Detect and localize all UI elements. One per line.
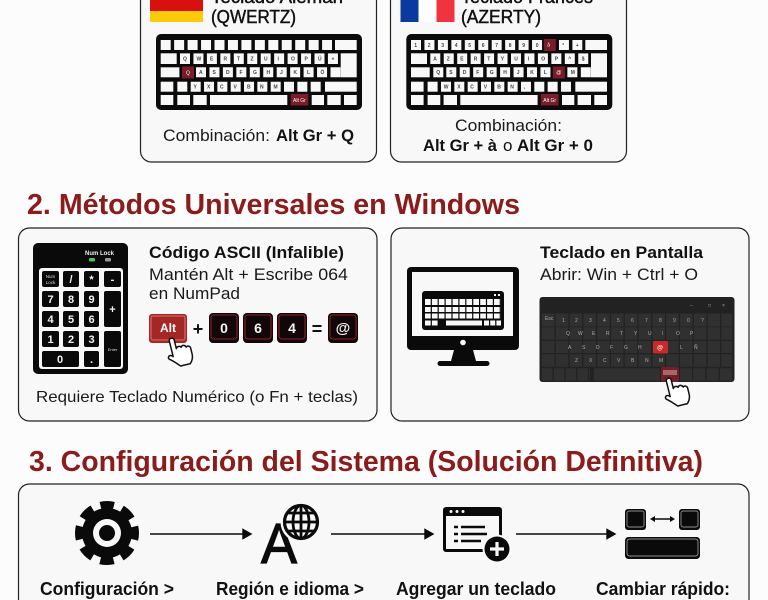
keyboard: AZERTY layout: QSDFGHJKLM [436, 70, 575, 76]
image: dark on-screen keyboard: −□× [690, 303, 725, 309]
icon: numeric keypad: 5 [68, 314, 74, 326]
image: dark on-screen keyboard [540, 297, 734, 382]
text: ASCII instructions: en NumPad [149, 284, 240, 303]
icon: numeric keypad: 0 [57, 354, 63, 366]
image: dark on-screen keyboard: 1234567890? [562, 318, 704, 324]
text: numeric keypad note: Requiere Teclado Numérico (o Fn + teclas) [36, 389, 358, 406]
icon: pointing hand [164, 334, 194, 368]
icon: gear [80, 506, 134, 560]
keyboard: AZERTY layout: Alt Gr [543, 98, 556, 104]
icon: numeric keypad: 2 [68, 334, 74, 346]
text: French combination: Alt Gr + à [423, 136, 498, 155]
icon: numeric keypad: . [90, 354, 93, 366]
icon: numeric keypad: 7 [47, 294, 54, 306]
icon: numeric keypad: Lock [46, 280, 56, 285]
icon: pointing hand [661, 374, 691, 408]
image: dark on-screen keyboard: Esc [545, 316, 554, 322]
text: German combination: Alt Gr + Q [276, 127, 354, 145]
image: dark on-screen keyboard: ASDFGHLÑ [568, 344, 698, 351]
text: French combination [423, 116, 593, 155]
icon: numeric keypad: / [69, 274, 73, 286]
text: on-screen keyboard heading: Abrir: Win + Ctrl + O [540, 265, 698, 284]
panel: French keyboard [390, 0, 626, 162]
key sequence: Alt + 0 6 4 = @: + [193, 319, 203, 339]
icon: numeric keypad: Enter [108, 347, 118, 352]
keyboard: AZERTY layout [406, 34, 612, 110]
keyboard: QWERTZ layout: Alt Gr [293, 98, 306, 104]
icon: numeric keypad: 6 [88, 314, 95, 326]
text: French combination: Combinación: [455, 116, 562, 135]
key sequence: Alt + 0 6 4 = @: 4 [288, 320, 296, 336]
text: French combination: Alt Gr + 0 [517, 136, 593, 155]
icon: numeric keypad [33, 243, 128, 374]
icon: numeric keypad: 8 [68, 294, 74, 306]
heading: section 2: 2. Métodos Universales en Windows [27, 189, 520, 221]
arrow: step 1 to 2 [150, 530, 251, 538]
keyboard: QWERTZ layout: YXCVBNM [194, 84, 278, 90]
heading: French keyboard [461, 0, 593, 27]
icon: numeric keypad: 3 [88, 334, 95, 346]
text: French combination: o [503, 136, 512, 155]
icon: numeric keypad: 4 [47, 314, 54, 326]
text: step labels: Configuración > [40, 579, 174, 599]
icon: numeric keypad: 9 [88, 294, 95, 306]
text: German combination: Combinación: [163, 127, 270, 145]
text: ASCII instructions: Mantén Alt + Escribe 064 [149, 265, 348, 284]
key sequence: Alt + 0 6 4 = @ [149, 313, 358, 343]
icon: numeric keypad: - [111, 274, 115, 286]
icon: French flag [400, 0, 454, 22]
key sequence: Alt + 0 6 4 = @: 0 [220, 320, 228, 336]
icon: numeric keypad: + [109, 304, 116, 316]
key sequence: Alt + 0 6 4 = @: 6 [254, 320, 262, 336]
icon: numeric keypad: Num [46, 274, 55, 279]
panel: German keyboard [140, 0, 376, 162]
image: dark on-screen keyboard: ZXCVBNM [575, 358, 663, 364]
text: ASCII instructions: Código ASCII (Infalible) [149, 243, 344, 262]
icon: numeric keypad: * [89, 274, 94, 286]
keyboard: QWERTZ layout [156, 34, 362, 110]
keyboard: AZERTY layout: AZERTYUIOP^$ [433, 56, 585, 62]
text: step labels: Cambiar rápido: [596, 579, 730, 599]
image: dark on-screen keyboard: QWERTYUIOP [566, 331, 694, 337]
key sequence: Alt + 0 6 4 = @: Alt [160, 321, 176, 335]
keyboard: AZERTY layout: à [547, 42, 550, 48]
icon: numeric keypad: 1 [47, 334, 54, 346]
heading: German keyboard [211, 0, 343, 27]
panel: ASCII code [18, 228, 377, 421]
text: step labels: Región e idioma > [216, 579, 364, 599]
image: dark on-screen keyboard: @ [657, 346, 663, 352]
keyboard: QWERTZ layout: QWERTZUIOPÜ+ [183, 56, 334, 62]
icon: German flag [150, 0, 203, 22]
keyboard: AZERTY layout: 1234567890°+ [414, 43, 579, 49]
panel: system configuration [18, 484, 749, 600]
text: German combination [163, 127, 354, 145]
keyboard: AZERTY layout: @ [556, 70, 561, 76]
icon: language and globe [261, 502, 322, 576]
icon: add keyboard window [443, 507, 512, 564]
text: ASCII instructions [149, 243, 348, 303]
keyboard: QWERTZ layout: ASDFGHJKLÖ [199, 69, 324, 76]
panel: on-screen keyboard [391, 228, 749, 421]
icon: monitor [407, 267, 519, 366]
heading: German keyboard: (QWERTZ) [211, 6, 296, 27]
text: on-screen keyboard heading: Teclado en Pantalla [540, 243, 704, 262]
text: step labels [40, 579, 730, 599]
icon: numeric keypad: Num Lock [85, 251, 115, 257]
keyboard: QWERTZ layout: Q [186, 70, 190, 76]
icon: switch keyboard shortcut [625, 509, 700, 559]
heading: French keyboard: (AZERTY) [461, 6, 541, 27]
key sequence: Alt + 0 6 4 = @: @ [336, 320, 350, 337]
text: step labels: Agregar un teclado [396, 579, 556, 599]
key sequence: Alt + 0 6 4 = @: = [312, 319, 322, 339]
keyboard: AZERTY layout: WXCVBN, [444, 84, 526, 90]
icon: language and globe: A [261, 512, 297, 576]
text: on-screen keyboard heading [540, 243, 704, 284]
arrow: step 2 to 3 [331, 530, 433, 538]
arrow: step 3 to 4 [516, 530, 615, 538]
heading: section 3: 3. Configuración del Sistema (Solución Definitiva) [29, 446, 703, 478]
